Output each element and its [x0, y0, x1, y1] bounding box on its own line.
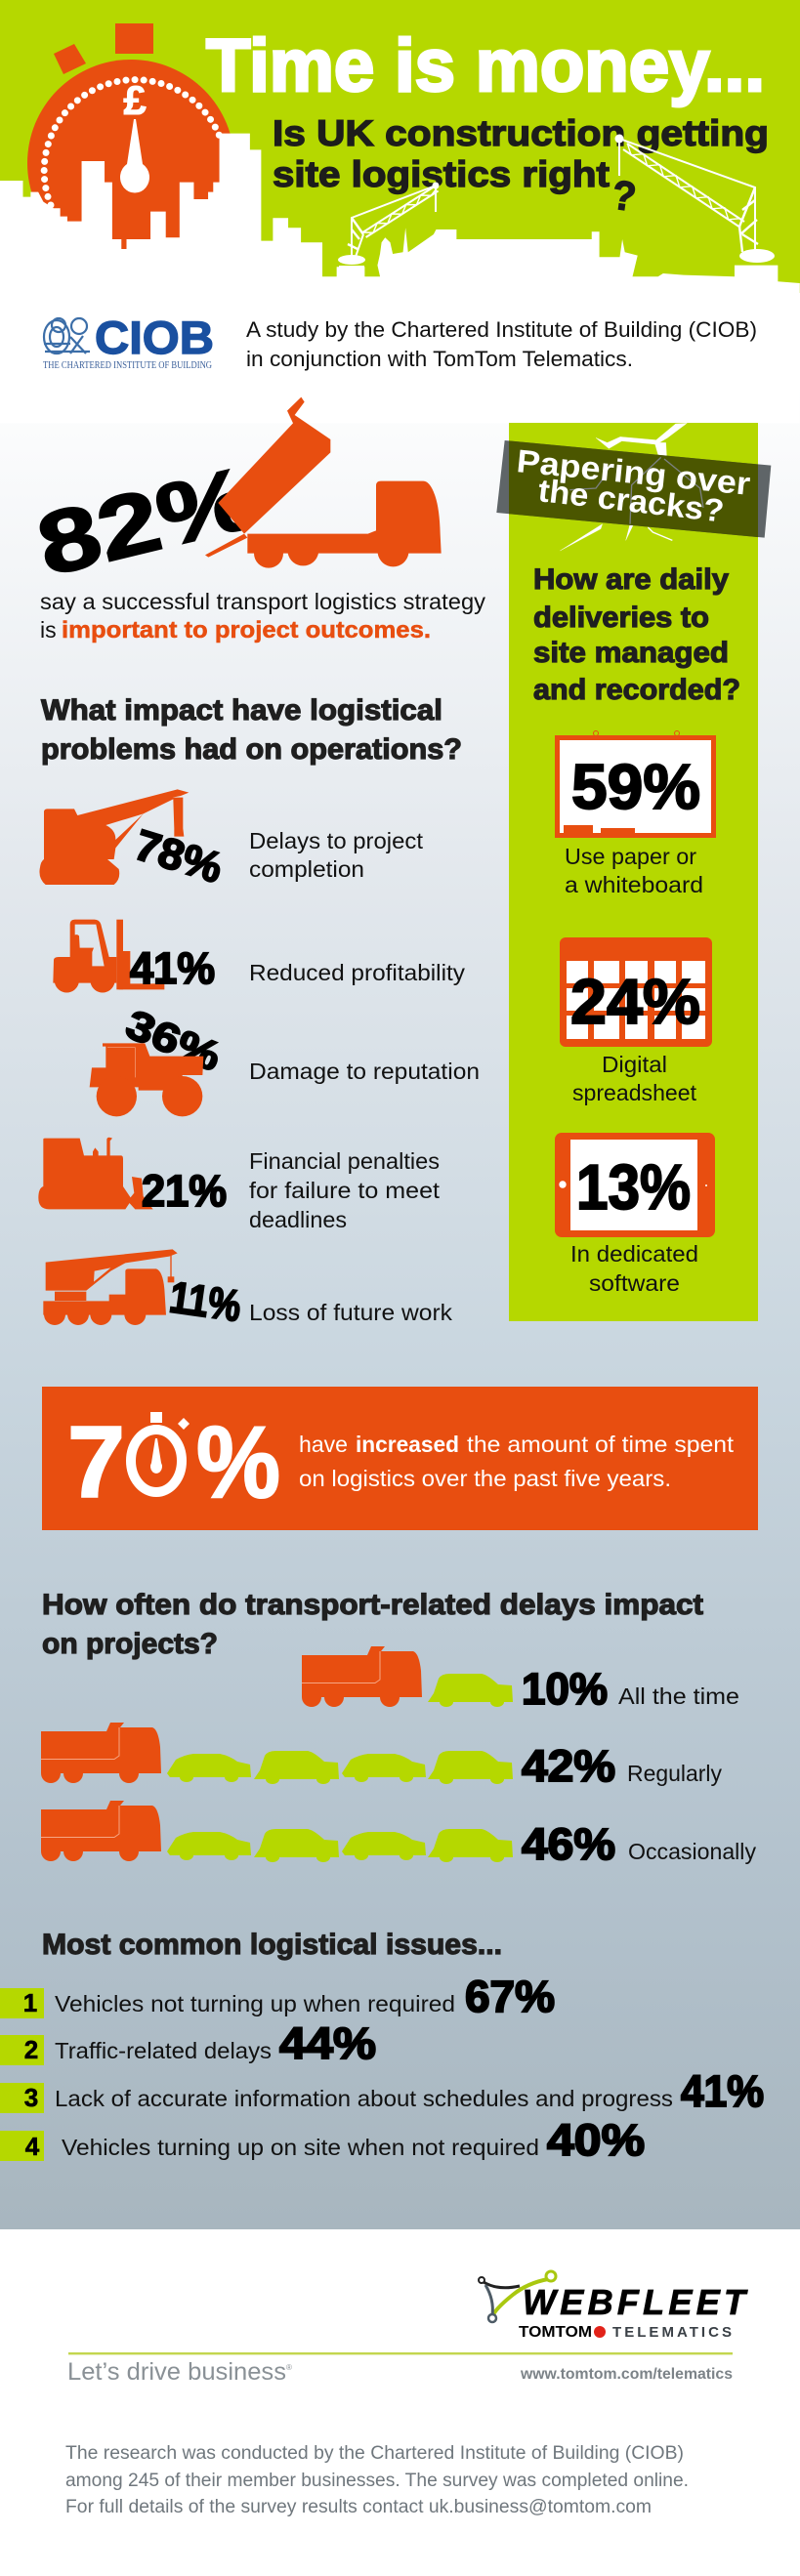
callout: 70% band: have — [299, 1432, 348, 1457]
row: 46% occasionally — [41, 1801, 756, 1869]
icon: mobile crane — [43, 1249, 178, 1325]
logo: CIOB: THE CHARTERED INSTITUTE OF BUILDING — [43, 360, 212, 371]
row: 11% future work: 11% — [167, 1271, 244, 1331]
row: 10% all the time — [302, 1646, 739, 1714]
research note: among 245 of their member businesses. The survey was completed online. — [65, 2471, 689, 2491]
callout: 70% band — [42, 1387, 758, 1530]
issue 1: Vehicles not turning up when required — [55, 1991, 455, 2016]
issue 2: 2 — [24, 2035, 38, 2064]
row: 10% all the time: 10% — [522, 1664, 608, 1714]
callout: 70% band: % — [196, 1406, 280, 1519]
banner crack lines — [569, 457, 703, 524]
row: 21% penalties: deadlines — [249, 1207, 347, 1232]
heading: daily deliveries question: How are daily — [533, 563, 729, 596]
research note: For full details of the survey results contact uk.business@tomtom.com — [65, 2497, 652, 2517]
row: 10% all the time: All the time — [618, 1683, 739, 1709]
issue 3 — [0, 2066, 764, 2116]
logo: CIOB — [43, 312, 214, 371]
panel: papering over the cracks: the cracks? — [536, 472, 726, 529]
callout: 70% band: on logistics over the past five years. — [299, 1466, 671, 1491]
icon: cracks — [560, 423, 687, 551]
card: whiteboard 59%: Use paper or — [565, 844, 696, 869]
heading: daily deliveries question — [533, 563, 740, 706]
icon: forklift — [53, 920, 164, 992]
text: 82% caption: is — [40, 617, 57, 643]
callout: 70% band: increased — [356, 1432, 459, 1457]
row: 36% reputation: 36% — [120, 1001, 228, 1080]
row: 78% delays: Delays to project — [249, 828, 424, 853]
row: 21% penalties — [38, 1138, 441, 1232]
heading: how often delays: on projects? — [42, 1628, 218, 1660]
card: spreadsheet 24%: Digital — [602, 1052, 667, 1077]
row: 78% delays — [39, 789, 424, 893]
logo: Webfleet TomTom Telematics: TOMTOM — [519, 2324, 592, 2341]
row: 21% penalties: for failure to meet — [249, 1178, 441, 1203]
row: 41% profitability: Reduced profitability — [249, 960, 466, 985]
stat: 82% with tipper truck: 82% — [28, 448, 265, 595]
text: 82% caption: say a successful transport logistics strategy — [40, 589, 486, 614]
card: tablet 13% — [555, 1133, 715, 1296]
row: 42% regularly: Regularly — [627, 1761, 722, 1786]
row: 11% future work — [43, 1249, 453, 1331]
row: 36% reputation — [90, 1001, 480, 1116]
issue 1 — [0, 1972, 555, 2021]
logo: Webfleet TomTom Telematics: WEBFLEET — [523, 2282, 748, 2322]
subtitle: ? — [610, 171, 639, 220]
heading: most common issues: Most common logistical issues... — [42, 1929, 502, 1961]
card: tablet 13%: 13% — [576, 1151, 691, 1223]
row: 42% regularly — [41, 1723, 722, 1791]
issue 2 — [0, 2018, 376, 2068]
row: 41% profitability: 41% — [130, 943, 215, 993]
issue 4: Vehicles turning up on site when not required — [62, 2135, 539, 2160]
row: 46% occasionally: 46% — [522, 1819, 615, 1869]
panel: papering over the cracks: Papering over — [515, 442, 752, 502]
issue 2: Traffic-related delays — [55, 2038, 272, 2063]
icon: truck and four cars — [41, 1723, 513, 1784]
card: spreadsheet 24% — [560, 937, 712, 1105]
panel: papering over the cracks — [496, 423, 771, 1321]
row: 41% profitability — [53, 920, 466, 993]
issue 3: 3 — [24, 2083, 38, 2112]
row: 11% future work: Loss of future work — [249, 1300, 453, 1325]
icon: whiteboard — [555, 730, 716, 838]
issue 4: 40% — [547, 2115, 645, 2165]
card: spreadsheet 24%: spreadsheet — [572, 1080, 697, 1105]
issue 4: 4 — [25, 2132, 40, 2161]
heading: daily deliveries question: and recorded? — [533, 674, 740, 706]
icon: tablet — [555, 1133, 715, 1237]
icon: stopwatch with pound sign: £ — [123, 77, 147, 123]
study intro text — [246, 317, 757, 371]
icon: webfleet road mark — [479, 2271, 556, 2322]
icon: truck and four cars — [41, 1801, 513, 1862]
issue 1: 67% — [465, 1972, 555, 2021]
subtitle — [273, 113, 769, 220]
icon: truck and car — [302, 1646, 513, 1707]
city skyline — [0, 134, 800, 423]
issue 3: 41% — [681, 2066, 764, 2116]
title: Time is money... — [206, 24, 765, 107]
study intro text: in conjunction with TomTom Telematics. — [246, 347, 633, 371]
tagline: ® — [286, 2363, 292, 2372]
row: 78% delays: completion — [249, 856, 364, 882]
icon: tipper truck — [205, 397, 442, 568]
heading: impact of logistical problems: problems had on operations? — [41, 733, 462, 766]
card: whiteboard 59% — [555, 730, 716, 897]
card: tablet 13%: software — [589, 1270, 680, 1296]
row: 42% regularly: 42% — [522, 1741, 615, 1791]
logo: Webfleet TomTom Telematics: TELEMATICS — [612, 2324, 732, 2341]
heading: daily deliveries question: deliveries to — [533, 602, 709, 634]
tagline: Let’s drive business — [67, 2358, 286, 2386]
icon: bulldozer — [38, 1138, 153, 1209]
website url: www.tomtom.com/telematics — [520, 2366, 733, 2383]
text: 82% caption — [40, 589, 486, 644]
issue 2: 44% — [279, 2018, 376, 2068]
callout: 70% band: the amount of time spent — [467, 1432, 735, 1457]
icon: spreadsheet — [560, 937, 712, 1047]
issue 3: Lack of accurate information about schedules and progress — [55, 2086, 673, 2111]
icon: dump truck — [90, 1043, 203, 1116]
issue 1: 1 — [23, 1988, 37, 2017]
card: whiteboard 59%: a whiteboard — [565, 872, 703, 897]
icon: stopwatch zero — [131, 1412, 189, 1492]
row: 21% penalties: 21% — [142, 1166, 227, 1216]
heading: impact of logistical problems: What impact have logistical — [41, 694, 442, 727]
issue 4 — [0, 2115, 645, 2165]
heading: how often delays: How often do transport-related delays impact — [42, 1589, 703, 1621]
icon: right crane — [615, 135, 775, 263]
icon: stopwatch with pound sign — [27, 23, 234, 267]
card: tablet 13%: In dedicated — [570, 1241, 698, 1267]
icon: left crane — [338, 182, 440, 277]
stat: 82% with tipper truck — [28, 397, 442, 595]
research note — [65, 2443, 689, 2517]
row: 21% penalties: Financial penalties — [249, 1148, 440, 1174]
row: 78% delays: 78% — [129, 821, 228, 893]
logo: CIOB: CIOB — [95, 312, 214, 363]
heading: impact of logistical problems — [41, 694, 462, 766]
subtitle: site logistics right — [273, 154, 610, 194]
row: 46% occasionally: Occasionally — [628, 1839, 756, 1864]
heading: daily deliveries question: site managed — [533, 637, 729, 669]
header panel — [0, 0, 800, 423]
icon: CIOB lion crest — [44, 318, 90, 353]
callout: 70% band: 7 — [67, 1406, 125, 1519]
study intro text: A study by the Chartered Institute of Building (CIOB) — [246, 317, 757, 342]
heading: how often delays — [42, 1589, 703, 1660]
icon: crawler crane — [39, 789, 189, 885]
card: spreadsheet 24%: 24% — [570, 966, 700, 1037]
banner — [496, 440, 771, 538]
card: whiteboard 59%: 59% — [571, 751, 700, 822]
footer rule — [68, 2352, 733, 2354]
logo: Webfleet TomTom Telematics — [479, 2271, 748, 2341]
subtitle: Is UK construction getting — [273, 113, 769, 153]
research note: The research was conducted by the Chartered Institute of Building (CIOB) — [65, 2443, 684, 2464]
row: 36% reputation: Damage to reputation — [249, 1059, 480, 1084]
text: 82% caption: important to project outcomes. — [62, 617, 431, 644]
